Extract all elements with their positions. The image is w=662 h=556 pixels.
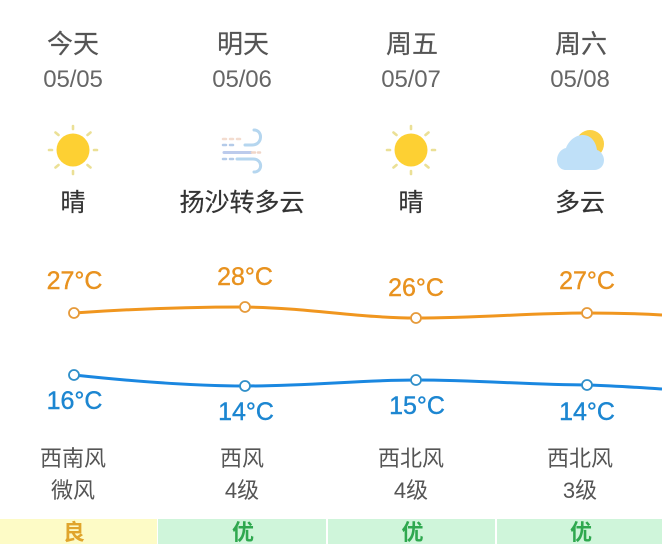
high temperature labels: 28°C xyxy=(217,263,273,291)
low temperature labels xyxy=(47,387,615,426)
air quality: today xyxy=(0,519,157,544)
low temperature labels: 14°C xyxy=(218,398,274,426)
icon: sun Friday xyxy=(386,124,436,176)
air quality: tomorrow xyxy=(158,519,326,544)
wind: Friday force: 4级 xyxy=(394,478,428,503)
wind: tomorrow direction: 西风 xyxy=(220,446,264,471)
date: Saturday: 05/08 xyxy=(550,66,610,93)
low temperature labels: 15°C xyxy=(389,392,445,420)
high temperature curve xyxy=(69,302,662,323)
condition: Friday: 晴 xyxy=(398,189,424,217)
wind: Friday direction: 西北风 xyxy=(378,446,444,471)
high temperature labels xyxy=(47,263,615,302)
condition: tomorrow: 扬沙转多云 xyxy=(179,189,304,217)
high temperature labels: 27°C xyxy=(559,267,615,295)
date: Friday: 05/07 xyxy=(381,66,441,93)
column: today header: 今天 xyxy=(47,29,99,59)
wind: today force: 微风 xyxy=(51,478,95,503)
condition: today: 晴 xyxy=(60,189,86,217)
column: tomorrow header: 明天 xyxy=(217,29,269,59)
low temperature labels: 14°C xyxy=(559,398,615,426)
date: today: 05/05 xyxy=(43,66,103,93)
wind: today direction: 西南风 xyxy=(40,446,106,471)
icon: sun today xyxy=(48,124,98,176)
column: Friday header: 周五 xyxy=(386,29,438,59)
low temperature curve xyxy=(69,370,662,391)
low temperature labels: 16°C xyxy=(47,387,102,415)
wind: tomorrow force: 4级 xyxy=(225,478,259,503)
wind: Saturday direction: 西北风 xyxy=(547,446,613,471)
condition: Saturday: 多云 xyxy=(555,189,605,217)
high temperature labels: 26°C xyxy=(388,274,444,302)
icon: cloud with sun xyxy=(557,130,604,170)
column: Saturday header: 周六 xyxy=(555,29,607,59)
air quality: Saturday xyxy=(497,519,662,544)
wind: Saturday force: 3级 xyxy=(563,478,597,503)
icon: wind and sand xyxy=(222,128,262,174)
air quality: Friday xyxy=(328,519,495,544)
date: tomorrow: 05/06 xyxy=(212,66,272,93)
high temperature labels: 27°C xyxy=(47,267,102,295)
